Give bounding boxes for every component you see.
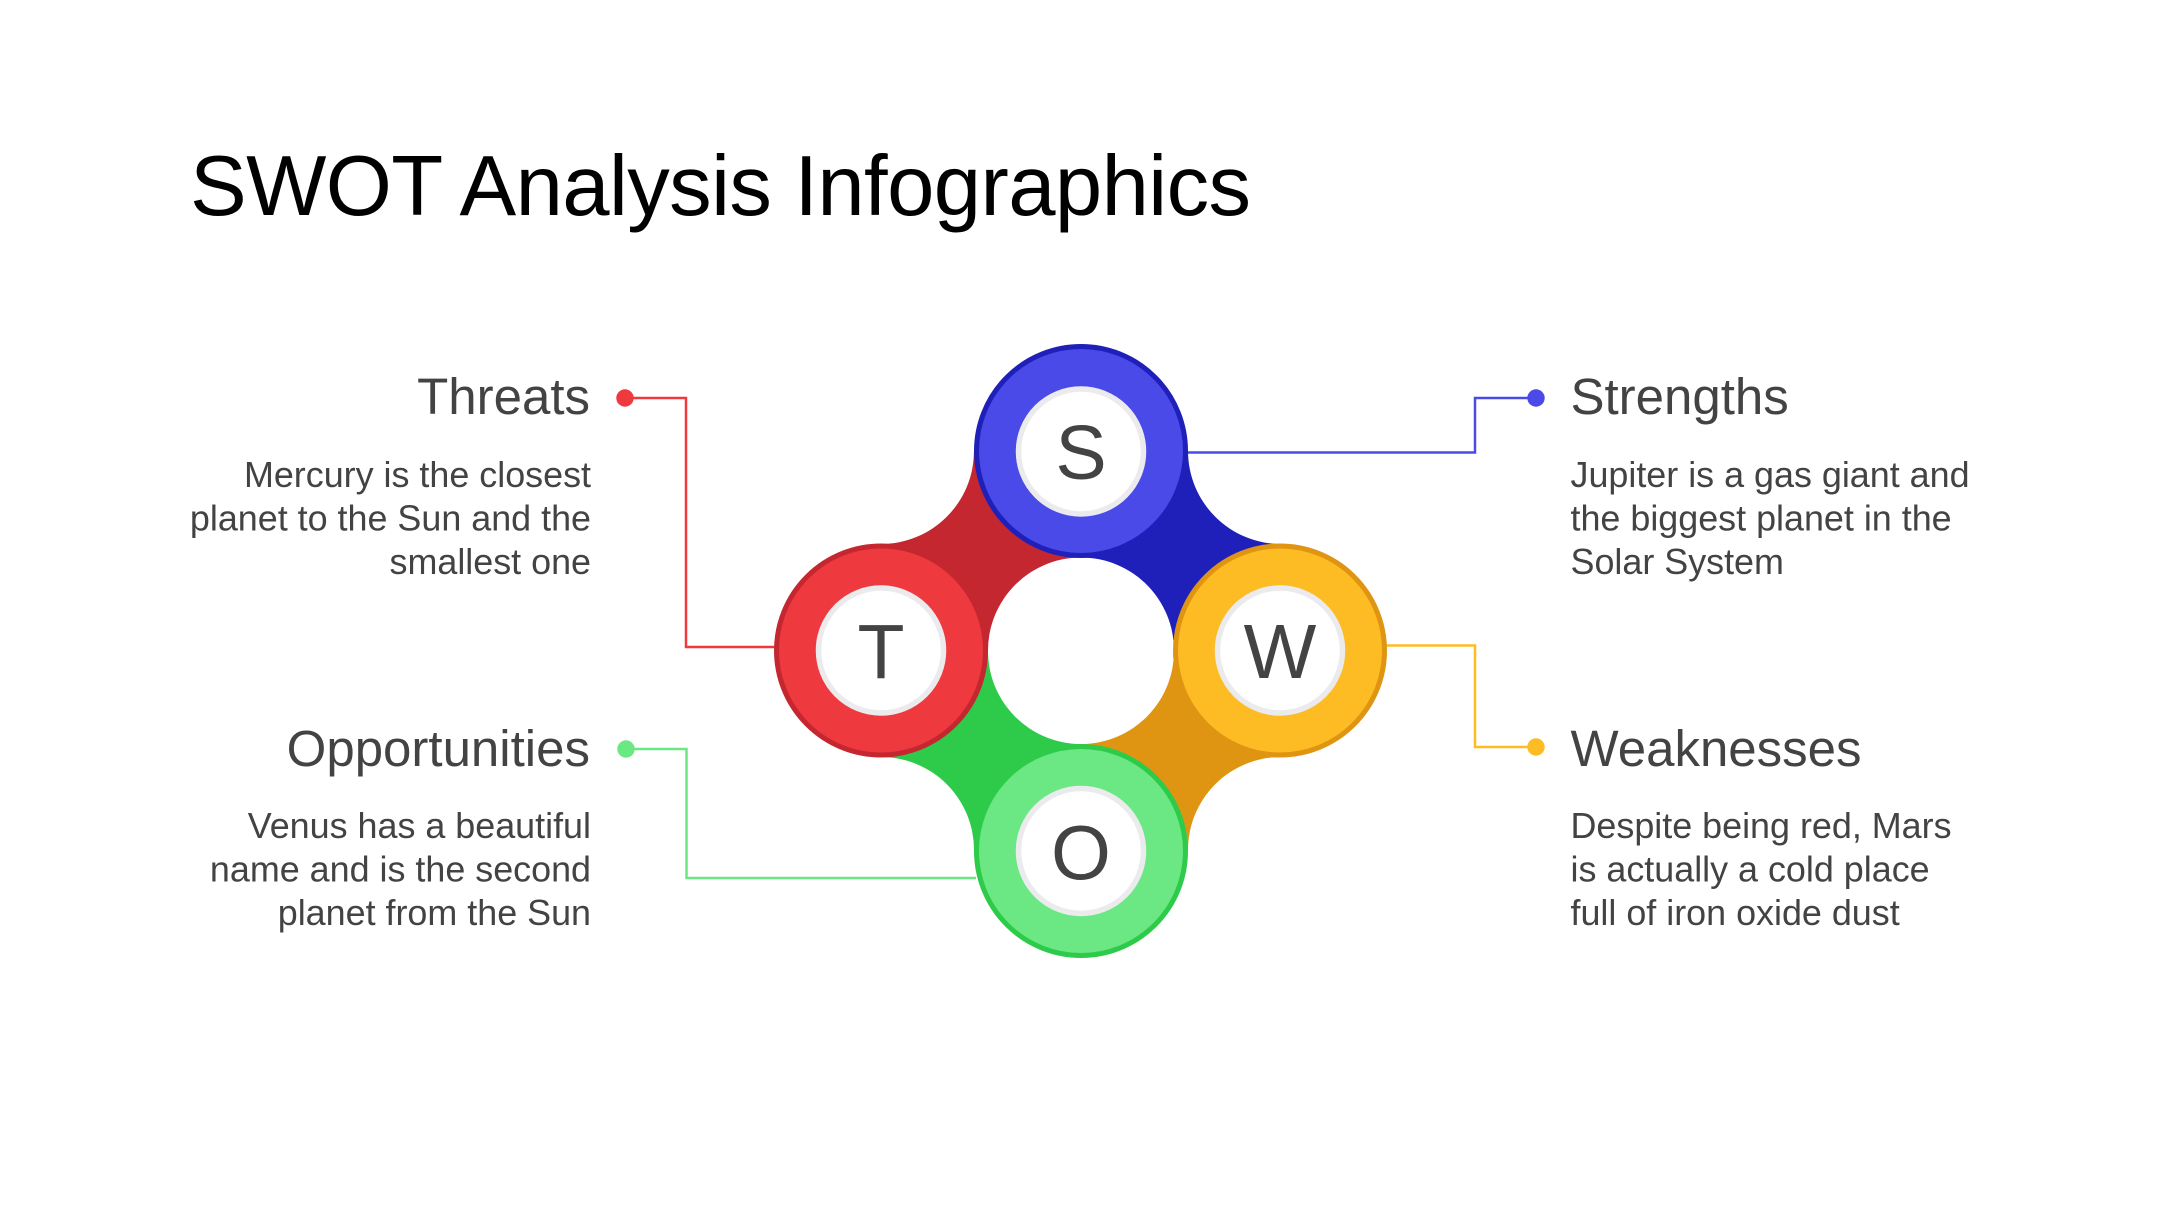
text block: opportunities: name and is the second [210, 850, 591, 890]
node: W [1176, 546, 1384, 755]
text block: opportunities: Venus has a beautiful [248, 806, 591, 846]
connector: threats [616, 389, 776, 647]
text block: strengths: Strengths [1570, 368, 1789, 425]
node: O [976, 746, 1186, 956]
node: S: S [1055, 410, 1107, 496]
text block: strengths: the biggest planet in the [1570, 498, 1952, 538]
text block: strengths [1570, 368, 1970, 582]
node: S [976, 346, 1186, 556]
text block: opportunities: Opportunities [287, 720, 590, 777]
text block: threats: smallest one [390, 542, 591, 582]
link: threats to strengths [881, 451, 1081, 650]
connector: opportunities [617, 740, 976, 878]
text block: threats: Threats [417, 368, 590, 425]
text block: threats [190, 368, 591, 582]
text block: weaknesses [1570, 720, 1952, 933]
text block: weaknesses: Weaknesses [1570, 720, 1862, 777]
text block: threats: planet to the Sun and the [190, 498, 591, 538]
node: T [776, 546, 986, 755]
text block: strengths: Jupiter is a gas giant and [1570, 455, 1970, 495]
node: O: O [1051, 810, 1111, 896]
text block: weaknesses: is actually a cold place [1570, 850, 1930, 890]
text block: opportunities: planet from the Sun [278, 893, 591, 933]
node: T: T [857, 609, 905, 695]
text block: weaknesses: full of iron oxide dust [1570, 893, 1900, 933]
text block: weaknesses: Despite being red, Mars [1570, 806, 1952, 846]
text block: strengths: Solar System [1570, 542, 1784, 582]
text block: threats: Mercury is the closest [244, 455, 591, 495]
link: weaknesses to opportunities [1081, 650, 1281, 851]
link: threats to opportunities [881, 650, 1081, 851]
SWOT diagram [776, 346, 1384, 956]
text block: opportunities [210, 720, 591, 933]
node: W: W [1244, 609, 1317, 695]
connector: weaknesses [1385, 646, 1545, 756]
connector: strengths [1186, 389, 1545, 452]
link: strengths to weaknesses [1081, 451, 1281, 650]
title: SWOT Analysis Infographics [190, 139, 1251, 234]
